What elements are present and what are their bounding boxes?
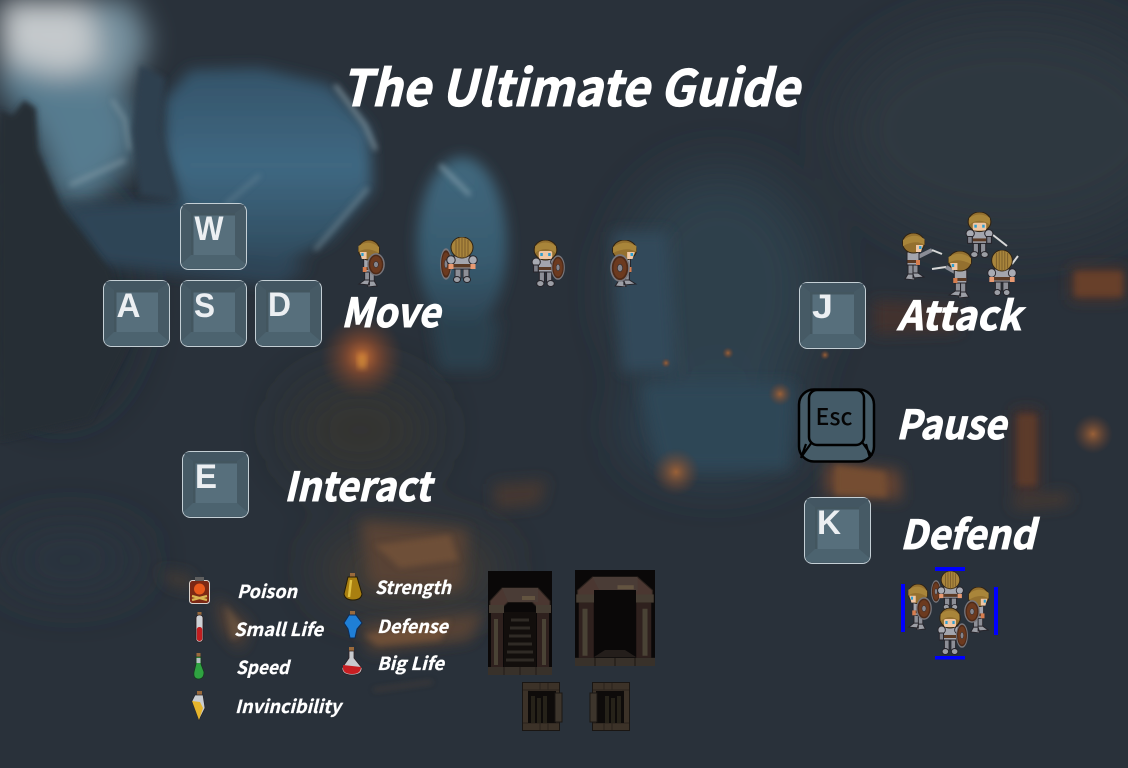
item: Speed: Speed	[236, 654, 291, 680]
item: Small Life	[196, 612, 325, 642]
key: S: S	[194, 287, 215, 325]
item: Poison: Poison	[237, 578, 298, 604]
key: J: J	[812, 288, 833, 326]
label: Defend: Defend	[900, 503, 1040, 561]
item: Strength: Strength	[375, 574, 452, 600]
door: stairway	[488, 571, 552, 675]
item: Small Life: Small Life	[234, 616, 325, 642]
item: Big Life: Big Life	[377, 650, 446, 676]
item: Invincibility	[192, 691, 344, 720]
panel: defend	[804, 498, 1040, 660]
panel: dungeon doors	[488, 570, 655, 730]
sprites: walking knight in four directions	[358, 237, 636, 287]
key: E: E	[195, 458, 217, 496]
label: Pause: Pause	[896, 393, 1010, 451]
key: Esc	[799, 390, 874, 462]
door: closed hatch left	[522, 682, 562, 730]
door: open archway	[575, 570, 655, 666]
item: Strength	[344, 573, 452, 600]
key: K	[804, 498, 870, 564]
item: Defense: Defense	[377, 613, 450, 639]
key: S	[180, 280, 246, 346]
key: W	[180, 204, 246, 270]
key: W: W	[194, 210, 224, 248]
panel: interact	[182, 452, 436, 518]
sprites: attacking knights	[902, 212, 1018, 298]
sprites: knights with blue block bars	[901, 567, 998, 660]
item: Big Life	[342, 647, 446, 676]
title: The Ultimate Guide	[341, 49, 803, 121]
item: Defense	[344, 611, 450, 639]
key: E	[182, 452, 248, 518]
key: K: K	[817, 504, 841, 542]
panel: potion legend	[190, 573, 452, 720]
key: A: A	[116, 287, 140, 325]
label: Interact: Interact	[284, 455, 436, 513]
label: Move: Move	[341, 281, 444, 339]
panel: attack	[800, 212, 1026, 348]
door: closed hatch right	[590, 682, 630, 730]
item: Poison	[190, 577, 298, 604]
item: Invincibility: Invincibility	[235, 693, 344, 719]
key: J	[800, 282, 866, 348]
item: Speed	[194, 653, 291, 680]
key: D: D	[268, 286, 291, 324]
key: Esc: Esc	[816, 398, 853, 432]
label: Attack: Attack	[896, 284, 1026, 342]
key: A	[104, 280, 170, 346]
key: D	[256, 280, 322, 346]
panel: move controls	[104, 204, 636, 346]
panel: pause	[799, 390, 1010, 462]
